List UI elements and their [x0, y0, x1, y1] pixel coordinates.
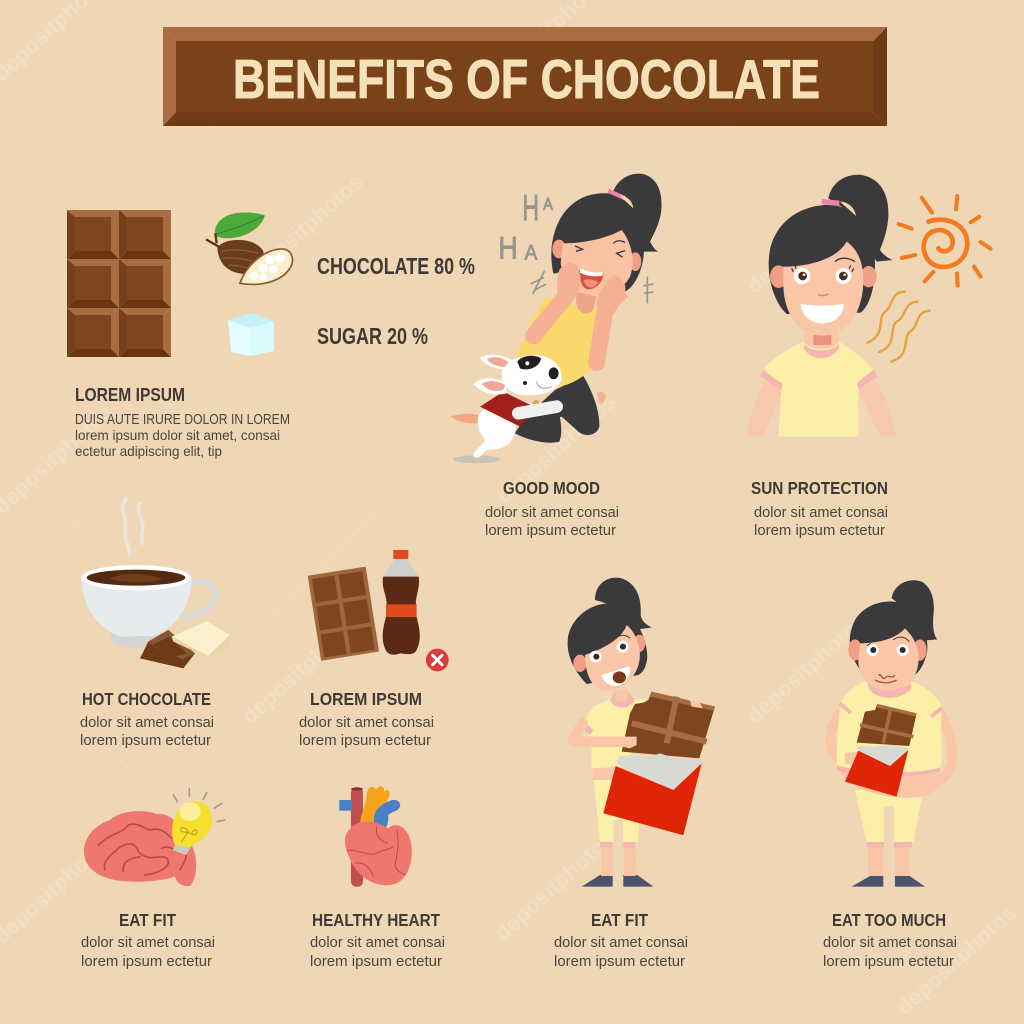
text: depositphotos — [742, 179, 871, 299]
caption: eat too much: dolor sit amet consai — [823, 935, 957, 951]
shoes — [582, 875, 653, 887]
face — [858, 628, 919, 691]
caption: hot chocolate — [80, 689, 214, 749]
hair back — [551, 193, 644, 292]
shirt — [837, 680, 942, 772]
intro text block: LOREM IPSUM — [75, 384, 185, 405]
icon: hot chocolate cup — [81, 498, 230, 668]
text: depositphotos — [742, 609, 871, 729]
red wrapper — [845, 750, 908, 797]
illustration: girl eating chocolate — [568, 578, 715, 887]
eyes — [792, 258, 855, 284]
midriff — [593, 766, 617, 780]
icon: cacao pod — [206, 212, 292, 284]
stuffed mouth — [875, 675, 897, 683]
sleeve cuff — [578, 719, 593, 735]
brain folds — [98, 824, 186, 875]
collar — [867, 682, 912, 698]
trouser cuffs — [867, 842, 884, 847]
lower legs — [601, 847, 613, 876]
cocoa surface — [87, 570, 185, 586]
tilted chocolate — [308, 567, 379, 661]
laughter marks — [531, 271, 653, 303]
icon: chocolate bar and soda — [308, 550, 449, 671]
smile — [801, 304, 844, 323]
eyes — [589, 635, 630, 663]
silver foil — [856, 745, 909, 766]
caption: eat fit brain: dolor sit amet consai — [81, 935, 215, 951]
open mouth — [602, 666, 630, 686]
ponytail — [828, 175, 893, 262]
caption: eat too much: EAT TOO MUCH — [832, 910, 946, 930]
soda bottle — [393, 550, 408, 559]
shoes — [852, 875, 925, 887]
caption: lorem ipsum: dolor sit amet consai — [299, 715, 434, 731]
eyes — [867, 637, 909, 656]
trousers — [855, 790, 923, 843]
caption: hot chocolate: lorem ipsum ectetur — [80, 733, 211, 749]
face — [783, 242, 863, 336]
hair — [769, 205, 875, 314]
brain — [84, 811, 196, 886]
heat waves — [867, 292, 930, 362]
laughter letters: A — [525, 239, 538, 264]
caption: hot chocolate: HOT CHOCOLATE — [82, 689, 211, 709]
ears — [848, 639, 927, 661]
shirt — [582, 697, 647, 768]
caption: healthy heart: lorem ipsum ectetur — [310, 954, 442, 970]
caption: lorem ipsum — [299, 689, 434, 749]
neck — [576, 292, 597, 313]
hair tie and highlight — [608, 191, 625, 198]
yellow shirt — [516, 298, 597, 387]
caption: lorem ipsum: LOREM IPSUM — [310, 689, 422, 709]
closed eyes — [575, 239, 625, 257]
text: depositphotos — [492, 389, 621, 509]
caption: eat fit: dolor sit amet consai — [554, 935, 688, 951]
face — [561, 230, 633, 295]
chocolate bar — [67, 210, 171, 357]
open mouth — [579, 267, 604, 289]
sun — [899, 196, 991, 286]
red cross badge — [426, 649, 449, 671]
caption: sun protection: dolor sit amet consai — [754, 505, 888, 521]
caption: lorem ipsum: lorem ipsum ectetur — [299, 733, 431, 749]
intro text block: ectetur adipiscing elit, tip — [75, 443, 222, 459]
laughter letters: A — [543, 194, 553, 213]
face — [585, 625, 640, 691]
caption: healthy heart: HEALTHY HEART — [312, 910, 440, 930]
handle — [182, 582, 216, 618]
hands — [558, 263, 627, 313]
legs — [515, 376, 599, 443]
sleeve cuffs — [839, 703, 942, 717]
ears — [552, 240, 641, 271]
bulb base — [173, 841, 192, 855]
caption: eat fit: EAT FIT — [591, 910, 648, 930]
hair tie and highlight — [822, 202, 839, 203]
text: depositphotos — [892, 900, 1021, 1020]
hair — [850, 601, 927, 676]
text: depositphotos — [490, 826, 619, 946]
arm — [573, 723, 628, 742]
red wrapper — [603, 763, 702, 835]
caption: sun protection: lorem ipsum ectetur — [754, 523, 885, 539]
caption: eat too much — [823, 910, 957, 970]
title: BENEFITS OF CHOCOLATE — [233, 48, 820, 110]
bulb rays — [173, 788, 225, 822]
steam — [123, 498, 143, 553]
caption: eat fit — [554, 910, 688, 970]
caption: good mood — [485, 478, 619, 539]
trouser cuffs — [600, 842, 613, 847]
nose — [818, 294, 828, 296]
intro text block — [75, 384, 290, 459]
caption: hot chocolate: dolor sit amet consai — [80, 715, 214, 731]
trousers — [593, 777, 640, 842]
title banner — [163, 27, 887, 126]
caption: sun protection — [751, 478, 888, 539]
caption: good mood: dolor sit amet consai — [485, 505, 619, 521]
ears — [770, 265, 877, 288]
ears — [573, 635, 645, 672]
fingers — [690, 700, 703, 708]
laughter letters: H — [522, 187, 539, 228]
caption: healthy heart: dolor sit amet consai — [310, 935, 445, 951]
icon: heart — [339, 786, 412, 887]
collar and neck — [610, 692, 635, 707]
ingredient labels: CHOCOLATE 80 % — [317, 253, 475, 279]
silver foil — [617, 753, 703, 790]
dark chocolate chunk — [140, 630, 195, 668]
text: depositphotos — [239, 169, 368, 289]
arms — [747, 377, 896, 437]
sleeve cuffs — [760, 369, 877, 390]
ponytail — [612, 174, 662, 252]
chocolate bar — [857, 704, 917, 746]
caption: eat fit brain: lorem ipsum ectetur — [81, 954, 212, 970]
caption: good mood: GOOD MOOD — [503, 478, 600, 498]
chocolate bar — [622, 692, 715, 758]
vena cava — [351, 787, 363, 887]
coronary vessels — [347, 827, 405, 877]
intro text block: lorem ipsum dolor sit amet, consai — [75, 427, 280, 443]
icon: brain with light bulb — [84, 788, 225, 886]
lower legs — [868, 847, 883, 876]
illustration: girl eating too much — [830, 580, 952, 887]
laughter letters — [498, 187, 553, 266]
caption: eat fit brain — [81, 910, 215, 970]
shirt — [765, 342, 873, 437]
cup body — [82, 578, 192, 637]
bulb glass — [172, 801, 212, 847]
intro text block: DUIS AUTE IRURE DOLOR IN LOREM — [75, 412, 290, 428]
ingredient labels: SUGAR 20 % — [317, 323, 428, 349]
ventricles — [345, 821, 412, 885]
collar — [804, 342, 839, 358]
hair — [568, 603, 647, 684]
foot — [597, 392, 606, 404]
ponytail — [892, 580, 937, 641]
arms — [830, 710, 952, 780]
caption: sun protection: SUN PROTECTION — [751, 478, 888, 498]
dog — [451, 355, 562, 463]
pulmonary artery — [339, 800, 352, 811]
caption: eat too much: lorem ipsum ectetur — [823, 954, 954, 970]
caption: healthy heart — [310, 910, 445, 970]
laughter letters: H — [498, 230, 518, 266]
white chocolate chunk — [172, 621, 230, 656]
icon: sugar cube — [228, 313, 274, 356]
saucer shadow — [110, 630, 160, 648]
pulmonary vessel — [374, 800, 400, 828]
caption: eat fit brain: EAT FIT — [119, 910, 176, 930]
caption: eat fit: lorem ipsum ectetur — [554, 954, 685, 970]
aorta — [360, 786, 390, 827]
arms — [533, 293, 606, 363]
text: depositphotos — [237, 609, 366, 729]
caption: good mood: lorem ipsum ectetur — [485, 523, 616, 539]
ingredient labels — [317, 253, 475, 349]
illustration: laughing girl with dog — [451, 174, 662, 463]
hand — [845, 752, 863, 765]
ponytail — [595, 578, 652, 629]
neck — [804, 333, 839, 349]
illustration: sun protection girl — [747, 175, 991, 437]
belly — [838, 768, 941, 798]
